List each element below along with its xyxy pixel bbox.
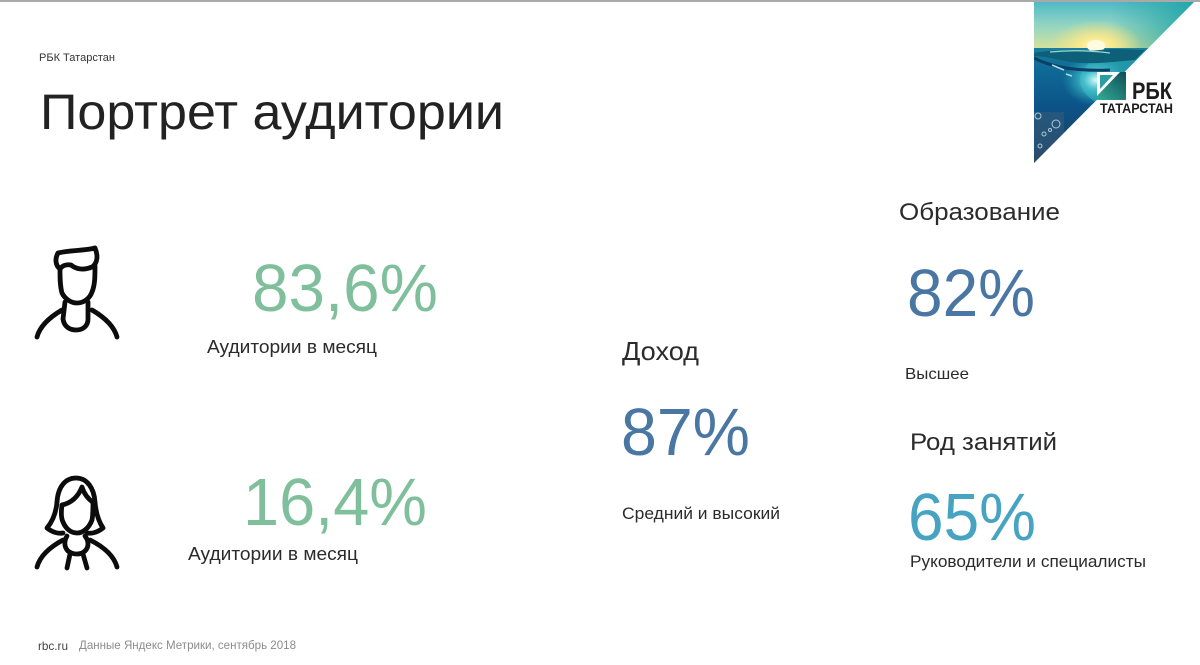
- caption: occupation: Руководители и специалисты: [910, 553, 1146, 571]
- heading: occupation: Род занятий: [910, 429, 1057, 456]
- stat: occupation: 65%: [908, 480, 1036, 555]
- caption: men: Аудитории в месяц: [207, 337, 377, 357]
- caption: education: Высшее: [905, 366, 969, 383]
- icon: woman: [37, 478, 117, 568]
- logo: РБК Татарстан mark: [1097, 72, 1173, 116]
- caption: income: Средний и высокий: [622, 505, 780, 523]
- title: Портрет аудитории: [40, 84, 504, 140]
- logo: РБК Татарстан mark: РБК: [1132, 78, 1172, 105]
- stat: education: 82%: [907, 256, 1035, 331]
- logo: ocean triangle image: [1034, 2, 1194, 163]
- top border line: [0, 0, 1200, 2]
- heading: income: Доход: [622, 336, 699, 366]
- caption: women: Аудитории в месяц: [188, 544, 358, 564]
- footer: site: rbc.ru: [38, 639, 68, 653]
- heading: education: Образование: [899, 199, 1060, 226]
- icon: man: [37, 248, 117, 337]
- stat: men share: 83,6%: [252, 251, 438, 326]
- stat: women share: 16,4%: [243, 465, 427, 540]
- stat: income: 87%: [621, 395, 750, 470]
- source label: РБК Татарстан: [39, 52, 115, 64]
- logo: РБК Татарстан mark: ТАТАРСТАН: [1100, 100, 1173, 116]
- footer: data source: Данные Яндекс Метрики, сентябрь 2018: [79, 638, 296, 652]
